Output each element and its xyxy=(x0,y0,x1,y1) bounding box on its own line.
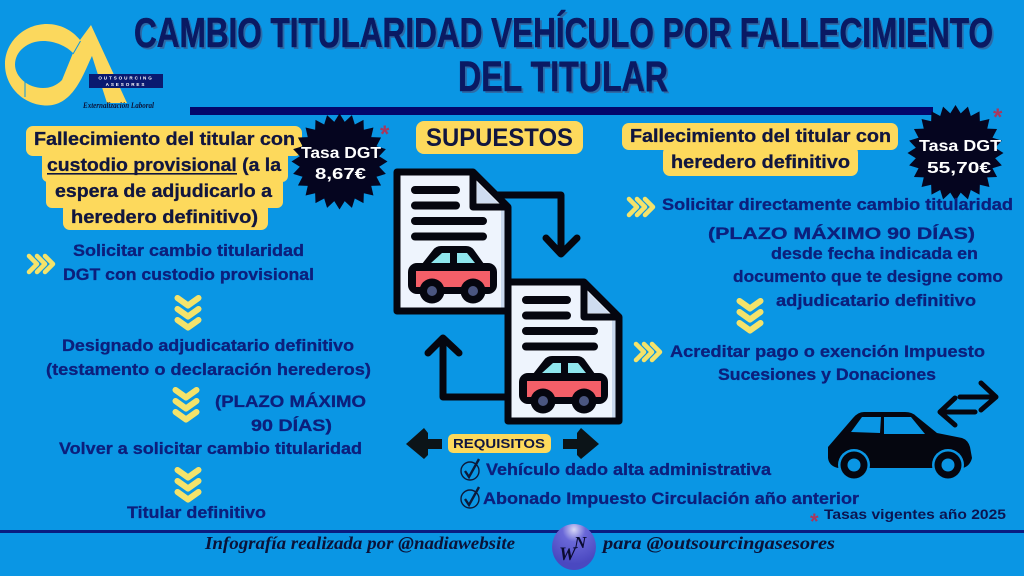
icon: WN ball logo xyxy=(552,524,596,570)
step: volver a solicitar: Volver a solicitar cambio titularidad xyxy=(59,440,362,458)
note: tasas vigentes: * xyxy=(810,509,819,534)
panel: custodio provisional heading xyxy=(26,126,302,230)
step: designado adjudicatario xyxy=(46,337,371,379)
plazo and document text: (PLAZO MÁXIMO 90 DÍAS) xyxy=(708,224,975,243)
step: acreditar pago: Acreditar pago o exención Impuesto xyxy=(670,343,985,361)
panel: heredero definitivo heading xyxy=(622,123,898,176)
right flow steps xyxy=(629,196,1013,384)
plazo máximo note: 90 DÍAS) xyxy=(251,416,332,435)
plazo and document text: adjudicatario definitivo xyxy=(776,292,976,310)
title: DEL TITULAR xyxy=(460,55,670,103)
footer credit xyxy=(204,524,835,570)
asterisk left: * xyxy=(380,121,390,148)
left flow steps xyxy=(29,242,371,522)
badge: tasa DGT 8,67 xyxy=(292,114,388,210)
plazo and document text: documento que te designe como xyxy=(733,268,1003,286)
document 1 xyxy=(397,172,508,311)
note: tasas vigentes xyxy=(810,506,1006,534)
badge: tasa DGT 8,67: Tasa DGT xyxy=(301,145,381,162)
document 2 xyxy=(508,282,619,421)
icon: chevrons right 2 xyxy=(636,344,660,360)
badge: tasa DGT 55,70 xyxy=(908,105,1004,201)
logo: Outsourcing Asesores: Externalización Laboral xyxy=(82,101,155,110)
icon: chevrons down 3 xyxy=(178,470,198,500)
step: acreditar pago: Sucesiones y Donaciones xyxy=(718,366,936,384)
icon: WN ball logo: W xyxy=(559,544,577,565)
arrow right xyxy=(563,428,599,459)
panel: custodio provisional heading: Fallecimiento del titular con xyxy=(34,128,295,149)
arrow: document 2 to 1 xyxy=(428,338,506,397)
icon: chevrons right xyxy=(629,199,653,215)
icon: documents with cars and cycle arrows xyxy=(397,172,619,421)
panel: custodio provisional heading: espera de adjudicarlo a xyxy=(55,180,273,201)
icon: black car with transfer arrows xyxy=(828,383,996,481)
asterisk right: * xyxy=(993,104,1003,131)
title xyxy=(134,9,995,103)
requirement 1: Vehículo dado alta administrativa xyxy=(486,461,772,479)
arrow: document 1 to 2 xyxy=(498,195,577,254)
panel: custodio provisional heading: custodio provisional (a la xyxy=(47,154,282,175)
icon: chevrons down 2 xyxy=(176,390,196,420)
step: solicitar directamente: Solicitar directamente cambio titularidad xyxy=(662,196,1013,214)
icon: chevrons right xyxy=(29,256,53,272)
panel: custodio provisional heading: heredero definitivo) xyxy=(71,206,258,227)
badge: tasa DGT 55,70: 55,70€ xyxy=(927,160,991,177)
icon: chevrons down 1 xyxy=(178,298,198,328)
panel: heredero definitivo heading: heredero definitivo xyxy=(671,151,850,172)
plazo and document text xyxy=(708,224,1003,310)
arrow left xyxy=(406,428,442,459)
plazo máximo note: (PLAZO MÁXIMO xyxy=(215,392,366,411)
logo: Outsourcing Asesores: OUTSOURCING xyxy=(98,76,154,80)
step: solicitar cambio: DGT con custodio provisional xyxy=(63,266,314,284)
badge: tasa DGT 8,67: 8,67€ xyxy=(315,166,366,183)
panel: heredero definitivo heading: Fallecimiento del titular con xyxy=(630,125,891,146)
step: titular definitivo: Titular definitivo xyxy=(127,504,266,522)
step: solicitar cambio: Solicitar cambio titularidad xyxy=(73,242,304,260)
step: designado adjudicatario: (testamento o declaración herederos) xyxy=(46,361,371,379)
note: tasas vigentes: Tasas vigentes año 2025 xyxy=(824,506,1006,522)
footer credit: para @outsourcingasesores xyxy=(601,533,835,553)
badge: tasa DGT 55,70: Tasa DGT xyxy=(919,138,1001,155)
step: acreditar pago xyxy=(670,343,985,384)
plazo máximo note xyxy=(215,392,366,435)
requirement 2: Abonado Impuesto Circulación año anterior xyxy=(483,490,860,508)
step: designado adjudicatario: Designado adjudicatario definitivo xyxy=(62,337,354,355)
icon: WN ball logo: N xyxy=(573,533,587,552)
heading: supuestos: SUPUESTOS xyxy=(426,124,573,152)
step: solicitar cambio xyxy=(63,242,314,284)
heading: requisitos xyxy=(448,434,551,453)
heading: requisitos: REQUISITOS xyxy=(453,436,545,451)
logo: Outsourcing Asesores: ASESORES xyxy=(106,82,146,87)
panel: requisitos xyxy=(406,428,860,508)
footer credit: Infografía realizada por @nadiawebsite xyxy=(204,533,515,553)
logo: Outsourcing Asesores xyxy=(5,24,163,110)
plazo and document text: desde fecha indicada en xyxy=(771,245,978,263)
title: DEL TITULAR xyxy=(458,53,668,101)
icon: chevrons down xyxy=(740,301,760,330)
